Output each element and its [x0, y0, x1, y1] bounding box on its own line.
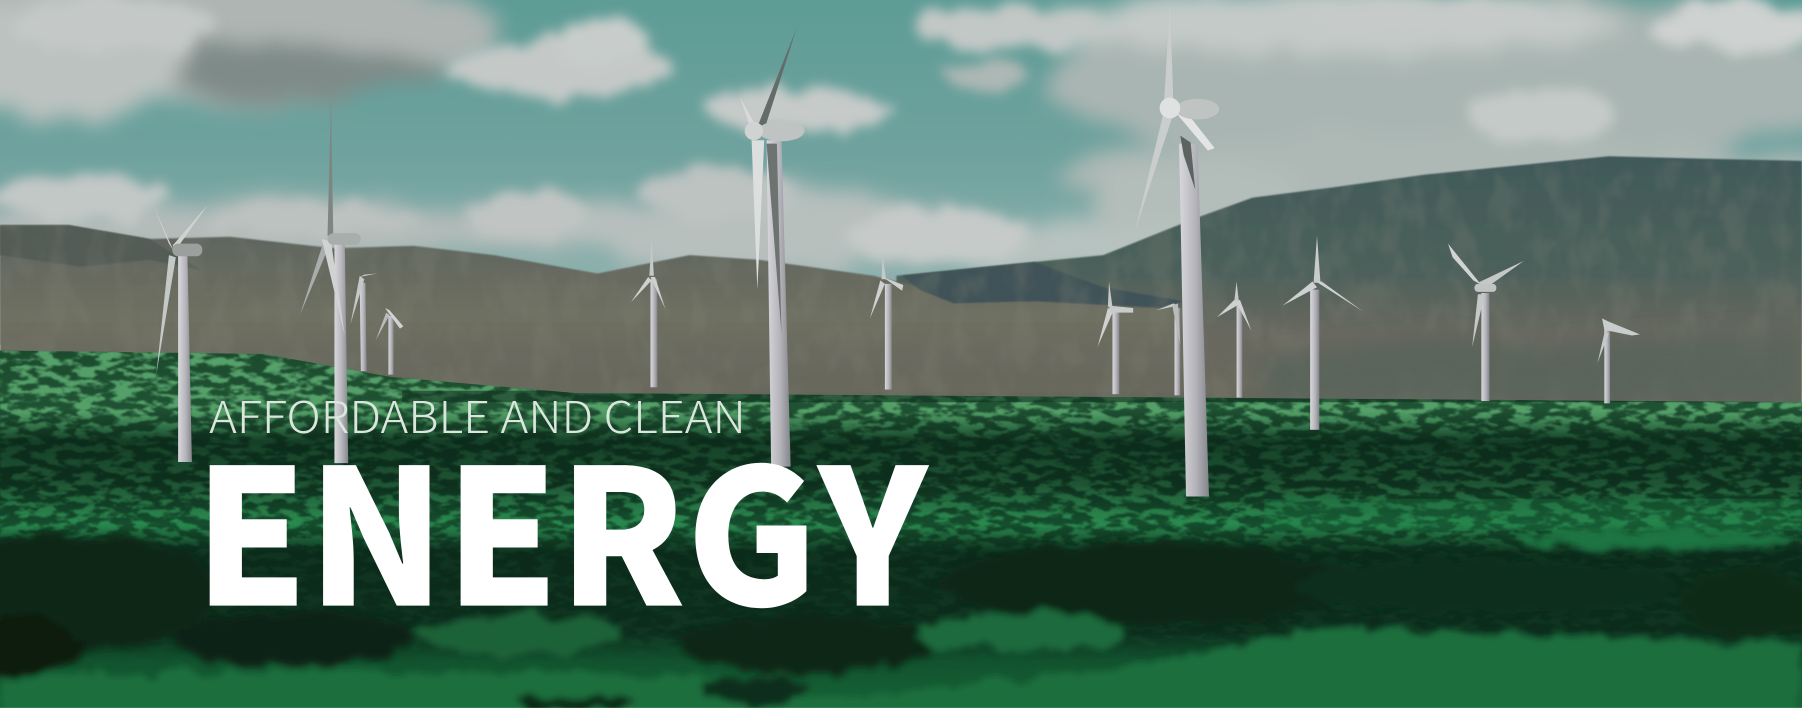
bottom white edge: [0, 708, 1802, 711]
field: [0, 351, 1802, 711]
clouds: [0, 0, 1802, 272]
main heading: ENERGY: [194, 388, 930, 661]
wind turbine 3: [351, 274, 377, 371]
wind turbine 10: [1217, 282, 1252, 398]
subtitle: AFFORDABLE AND CLEAN: [209, 382, 746, 446]
mountains: far right ridge: [896, 156, 1802, 405]
title block: [194, 382, 930, 661]
wind turbine 9: [1156, 303, 1180, 395]
wind turbine 12: foreground: [1135, 2, 1219, 496]
wind turbine 7: [870, 255, 903, 390]
mountains: tree haze at foot: [1264, 330, 1802, 405]
dark bushes and foreground: [0, 531, 1802, 711]
wind turbine 5: [631, 239, 665, 387]
wind turbine 11: [1283, 236, 1363, 430]
mountains: dark slope at far left: [0, 225, 201, 270]
mountains: left range: [0, 225, 1218, 405]
mountains: dark distant ridge: [902, 262, 1184, 308]
wind turbine 8: [1098, 282, 1133, 394]
wind turbine 14: [1597, 318, 1640, 403]
wind turbine 1: [153, 205, 208, 462]
wind turbine 2: [300, 101, 361, 463]
wind turbine 6: [740, 29, 804, 467]
wind turbine 13: [1448, 244, 1524, 401]
mountains: rock texture: [10, 162, 1794, 309]
wind turbine 4: [376, 308, 403, 375]
sky: [0, 0, 1802, 345]
